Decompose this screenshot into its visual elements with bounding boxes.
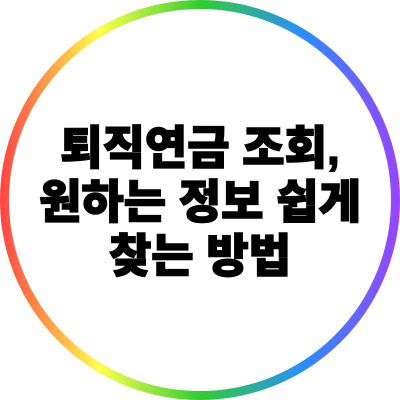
title line 2: 원하는 정보 쉽게 — [39, 176, 361, 228]
title line 3: 찾는 방법 — [109, 230, 291, 282]
title line 1: 퇴직연금 조회, — [60, 122, 340, 174]
title — [39, 122, 361, 282]
